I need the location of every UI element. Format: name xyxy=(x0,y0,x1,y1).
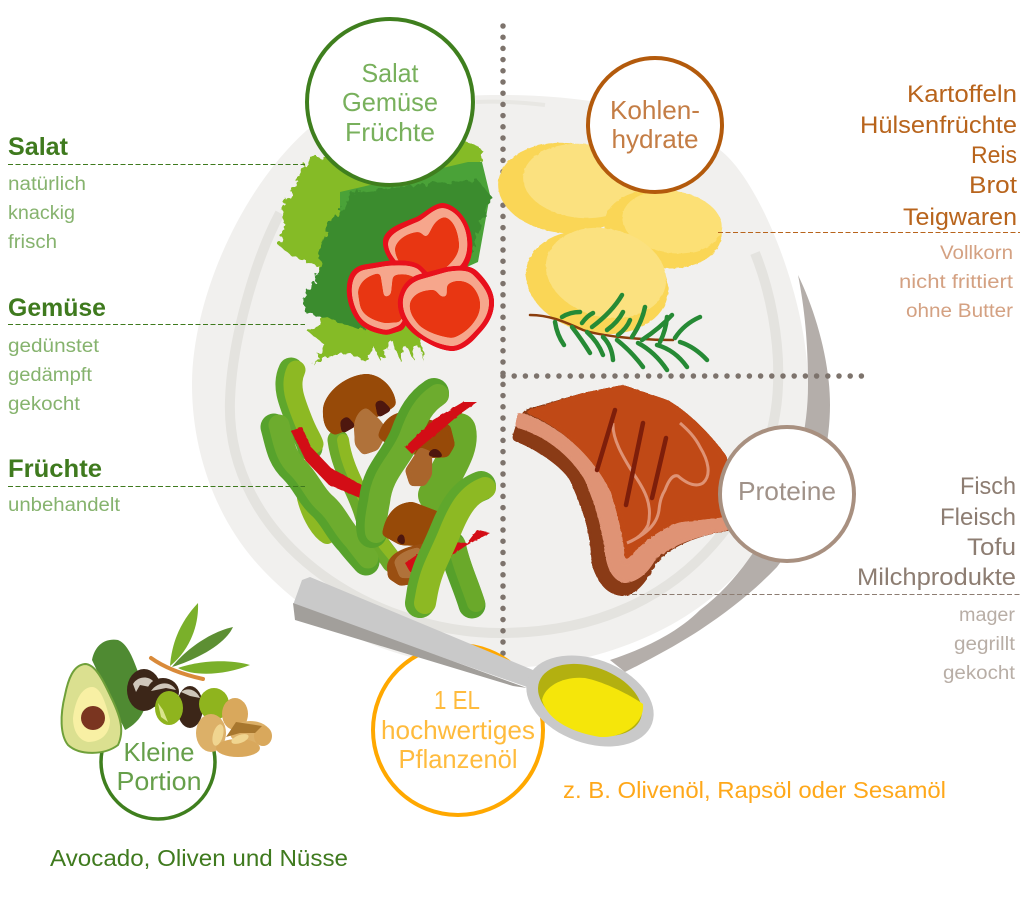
text: Gemüse: gekocht xyxy=(8,394,81,415)
text: Kleine Portion xyxy=(116,737,202,796)
circle: Pflanzenöl: 1 EL xyxy=(434,685,480,715)
bean under left xyxy=(305,498,327,536)
text: carbohydrate foods: nicht frittiert xyxy=(899,272,1014,293)
text: Gemüse: gedämpft xyxy=(8,365,93,386)
divider: horizontal dotted line xyxy=(503,373,871,379)
illustration: spoon with oil xyxy=(293,577,666,763)
text: protein foods: Fisch xyxy=(960,473,1016,500)
circle: Kleine Portion xyxy=(101,705,215,819)
plate xyxy=(192,95,830,672)
text: Salat: Salat xyxy=(8,133,69,161)
text: protein foods: Milchprodukte xyxy=(857,564,1016,591)
circle: Kohlenhydrate: hydrate xyxy=(612,124,698,154)
circle: Pflanzenöl xyxy=(373,645,543,815)
text: Salat: natürlich xyxy=(8,174,86,195)
text: Salat: frisch xyxy=(8,232,57,253)
text: protein foods: gegrillt xyxy=(954,634,1016,655)
text: carbohydrate foods: Hülsenfrüchte xyxy=(860,112,1017,139)
red pepper strip left xyxy=(291,427,376,498)
bean behind center xyxy=(338,440,395,562)
circle: Salat Gemüse Früchte xyxy=(307,19,473,185)
text: Gemüse: gedünstet xyxy=(8,336,100,357)
illustration: potatoes xyxy=(494,137,727,347)
illustration: lettuce xyxy=(278,142,490,364)
text: protein foods: Tofu xyxy=(967,534,1016,561)
tomato slice top xyxy=(383,203,472,282)
text: carbohydrate foods: Kartoffeln xyxy=(907,81,1017,108)
illustration: tomato slices xyxy=(347,203,494,351)
potato lower xyxy=(516,216,678,347)
illustration: rosemary sprig xyxy=(530,295,707,370)
circle: Salat Gemüse Früchte: Salat xyxy=(362,58,419,88)
red pepper strip top xyxy=(405,402,477,454)
potato upper right xyxy=(599,182,727,276)
bean left long xyxy=(274,425,368,562)
circle: Salat Gemüse Früchte: Gemüse xyxy=(342,87,438,117)
text: Kleine Portion: Portion xyxy=(116,766,202,796)
tomato slice right xyxy=(398,266,494,351)
text: Früchte: Früchte xyxy=(8,455,102,483)
text: protein foods: Fleisch xyxy=(940,504,1016,531)
text: carbohydrate foods: ohne Butter xyxy=(906,301,1014,322)
circle: Salat Gemüse Früchte: Früchte xyxy=(345,117,435,147)
illustration: steak xyxy=(512,385,732,596)
text: protein foods: gekocht xyxy=(943,663,1016,684)
text: carbohydrate foods: Brot xyxy=(969,172,1017,199)
text: Gemüse: Gemüse xyxy=(8,294,106,322)
illustration: walnut xyxy=(196,698,272,757)
mushroom top xyxy=(323,374,396,455)
text: Früchte xyxy=(8,455,121,516)
mushroom bottom xyxy=(382,502,447,586)
steak fat streak xyxy=(613,423,708,543)
bean right light xyxy=(420,486,485,603)
circle: Kohlenhydrate xyxy=(588,58,722,192)
text: carbohydrate foods: Reis xyxy=(971,142,1017,169)
tomato slice left xyxy=(347,260,432,335)
circle: Proteine: Proteine xyxy=(738,476,836,506)
text: Früchte: unbehandelt xyxy=(8,495,121,516)
leader lines xyxy=(8,164,1020,594)
text: Kleine Portion: Kleine xyxy=(124,737,194,767)
red pepper strip bottom xyxy=(405,530,490,572)
text: protein foods xyxy=(857,473,1016,684)
text: small portion examples: Avocado, Oliven und Nüsse xyxy=(50,845,348,871)
illustration: avocado xyxy=(62,640,146,753)
text: carbohydrate foods: Vollkorn xyxy=(940,243,1013,264)
circle: Proteine xyxy=(720,427,854,561)
circle: Kohlenhydrate: Kohlen- xyxy=(610,95,700,125)
text: carbohydrate foods xyxy=(860,81,1017,322)
bean lower right xyxy=(452,545,476,605)
steak grill marks xyxy=(597,410,666,505)
text: Gemüse xyxy=(8,294,106,415)
bean right back xyxy=(435,430,460,495)
text: protein foods: mager xyxy=(959,605,1016,626)
circle: Pflanzenöl: hochwertiges xyxy=(381,715,535,745)
illustration: olive branch xyxy=(151,603,250,679)
bean top left xyxy=(288,370,314,448)
text: carbohydrate foods: Teigwaren xyxy=(903,204,1017,231)
illustration: olives xyxy=(127,669,229,728)
text: oil examples: z. B. Olivenöl, Rapsöl oder Sesamöl xyxy=(563,777,946,803)
potato upper left xyxy=(494,137,644,239)
illustration: green beans, mushrooms and pepper xyxy=(274,370,490,605)
text: Salat: knackig xyxy=(8,203,75,224)
text: Salat xyxy=(8,133,86,253)
mushroom middle xyxy=(378,412,455,486)
divider: vertical dotted line xyxy=(500,26,506,660)
bean center xyxy=(371,393,438,533)
circle: Pflanzenöl: Pflanzenöl xyxy=(398,744,518,774)
